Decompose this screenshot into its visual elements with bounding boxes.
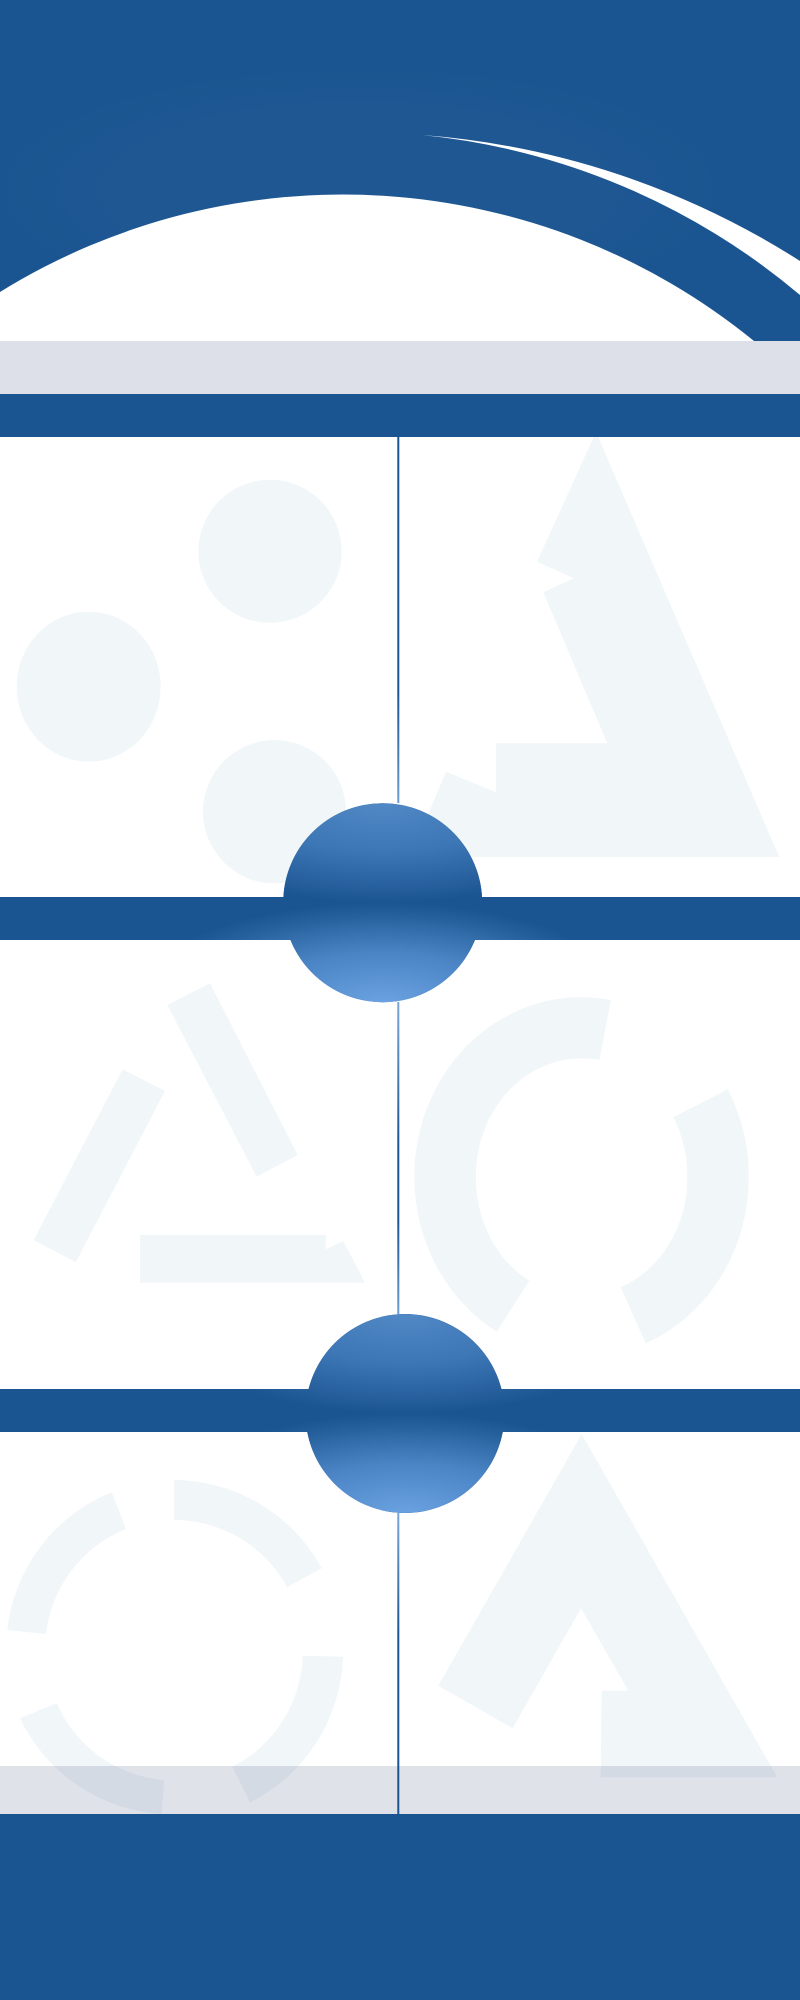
sphere one base (283, 803, 482, 1002)
pale ring arc right (621, 1089, 749, 1343)
sphere two bottom highlight (307, 1423, 503, 1513)
middle band two (0, 1389, 800, 1432)
band and sphere one (0, 803, 800, 1002)
header panel (0, 0, 800, 341)
line segment two (397, 1002, 399, 1314)
band and sphere two (0, 1314, 800, 1513)
pale bar base (140, 1235, 365, 1283)
pale bar left leaning (34, 1069, 165, 1262)
section three shapes (7, 1434, 777, 1814)
footer blue block (0, 1814, 800, 2000)
section two shapes (34, 983, 749, 1343)
pale broken triangle (410, 432, 779, 857)
sphere two base (306, 1314, 504, 1513)
sphere two top highlight (288, 1314, 522, 1402)
header blue field (0, 0, 800, 341)
pale ring segment top right (174, 1480, 322, 1587)
sphere two highlights (288, 1314, 522, 1513)
pale circle upper (198, 480, 342, 623)
pale bar right leaning (167, 983, 298, 1177)
bottom translucent grey band (0, 1766, 800, 1814)
pale circle lower (203, 740, 346, 883)
white dome arc (0, 195, 754, 341)
pale ring segment bottom left (20, 1703, 164, 1814)
upper blue band (0, 394, 800, 437)
line segment one (397, 437, 399, 803)
sphere one highlights (220, 803, 546, 1002)
pale ring segment bottom right (232, 1656, 343, 1802)
pale circle left (17, 612, 161, 762)
sphere one top highlight (284, 803, 482, 894)
pale ring segment top left (7, 1492, 126, 1634)
sphere one bottom highlight (220, 912, 546, 1002)
top grey band (0, 341, 800, 394)
header soft glow (0, 65, 730, 315)
pale broken triangle lower (438, 1434, 777, 1777)
white crescent swoosh (422, 135, 800, 295)
central vertical line (397, 437, 399, 1814)
section one shapes (17, 432, 779, 883)
pale ring arc left (414, 997, 611, 1332)
line segment three (397, 1513, 399, 1814)
middle band one (0, 897, 800, 940)
